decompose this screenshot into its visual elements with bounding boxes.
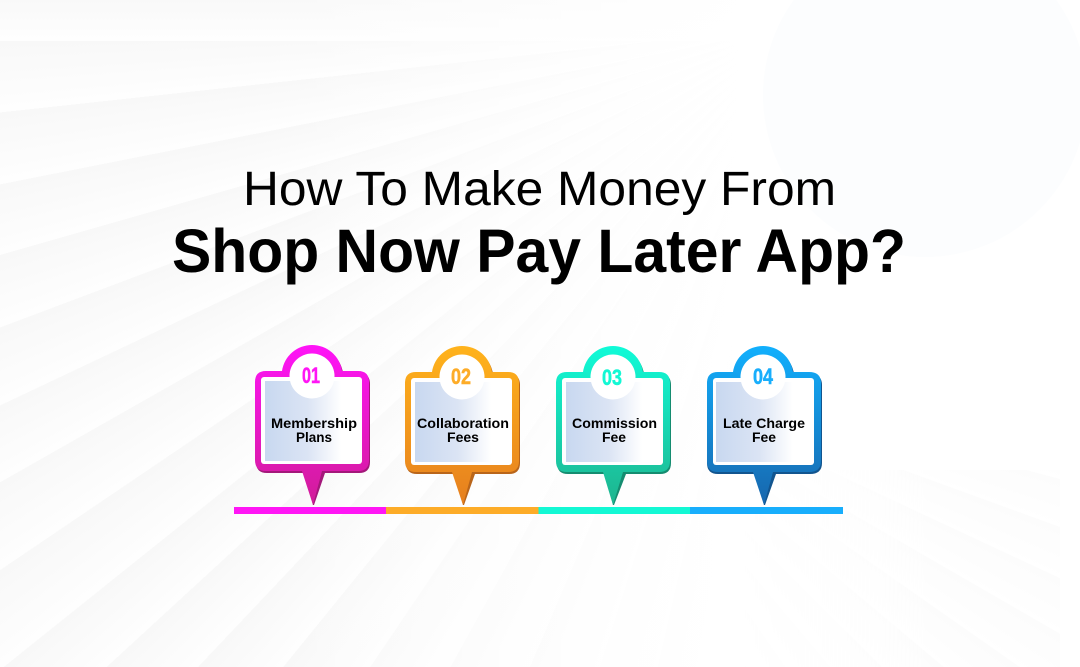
gradient panel [566,382,661,462]
label: Plans [296,430,332,445]
background: pale circle top right [763,0,1080,257]
number badge [440,354,484,400]
pin 02: Collaboration Fees [405,346,520,505]
label: Fee [752,430,777,445]
label: Fees [447,430,479,445]
number badge [740,354,786,400]
number: 03 [602,365,622,390]
title line 2: Shop Now Pay Later App? [172,217,906,285]
number: 02 [451,364,471,389]
pin body [255,345,369,505]
label [271,416,357,445]
inner white card [411,378,512,465]
pin 03: Commission Fee [556,346,671,505]
bar segment: teal [538,507,690,514]
label [417,416,509,445]
label: Commission [572,416,657,431]
number: 01 [302,363,320,388]
label: Late Charge [723,416,806,431]
label: Membership [271,416,357,431]
label: Collaboration [417,416,509,431]
bar segment: magenta [234,507,386,514]
gradient panel [265,381,360,461]
pin 01: Membership Plans [255,345,370,505]
title line 1: How To Make Money From [243,163,836,216]
label: Fee [602,430,627,445]
inner white card [713,378,814,465]
pin 04: Late Charge Fee [707,346,822,505]
number: 04 [753,364,774,389]
pin shadow [406,348,520,505]
inner white card [562,378,663,465]
gradient panel [716,382,812,462]
background: faint lower right rays [720,470,1060,667]
number badge [590,354,636,400]
title [172,163,906,285]
pin shadow [256,347,370,505]
number badge [290,354,334,398]
pin shadow [557,348,671,505]
pin body [405,346,519,505]
inner white card [261,377,362,464]
gradient panel [415,382,510,462]
pin body [707,346,821,505]
label [572,416,657,445]
timeline bar [234,507,843,514]
label [723,416,806,445]
bar segment: orange [386,507,538,514]
bar segment: blue [690,507,843,514]
pin body [556,346,670,505]
pin shadow [707,348,822,505]
background: top band [0,0,800,41]
